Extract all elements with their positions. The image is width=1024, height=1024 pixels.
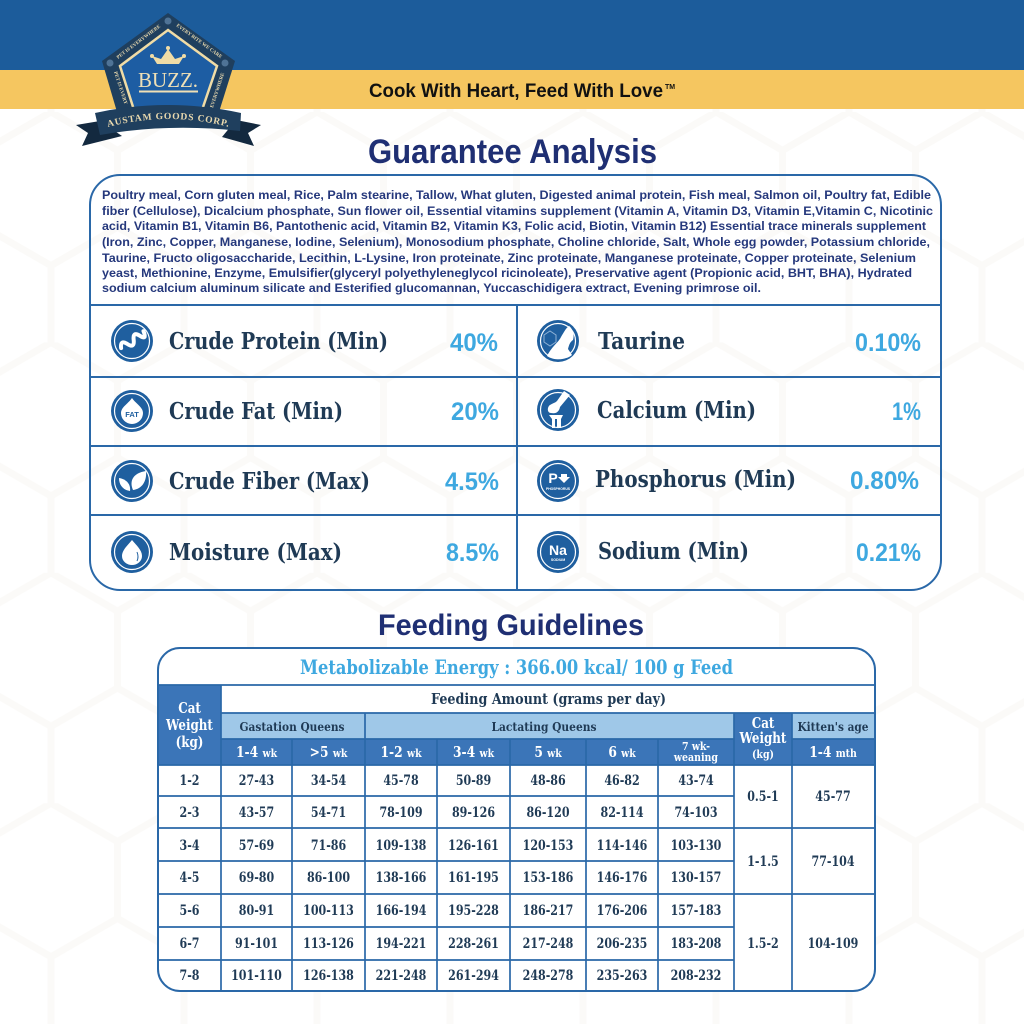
- cat weight header: Cat: [178, 701, 202, 717]
- icon: sodium: SODIUM: [551, 558, 565, 562]
- row 3-4: 57-69: [239, 837, 274, 853]
- value: crude fiber: 4.5%: [445, 468, 499, 496]
- row 1-2: 43-74: [678, 772, 714, 788]
- label: moisture: Moisture (Max): [169, 539, 342, 566]
- row 1-2: 50-89: [456, 772, 491, 788]
- ingredients text block: [102, 188, 933, 295]
- week sub-headers: weaning: [673, 751, 719, 764]
- row 7-8: 248-278: [523, 967, 573, 983]
- row 2-3: 78-109: [379, 804, 423, 820]
- icon: crude protein: [111, 320, 153, 362]
- value: sodium: 0.21%: [856, 539, 921, 567]
- icon: phosphorus: P: [548, 470, 558, 486]
- row 2-3: 82-114: [601, 804, 644, 820]
- row 7-8: 235-263: [597, 967, 647, 983]
- row 3-4: 126-161: [448, 837, 499, 853]
- icon: taurine: [537, 320, 579, 362]
- label: sodium: Sodium (Min): [598, 538, 749, 565]
- ingredients text block: yeast, Methionine, Enzyme, Emulsifier(glyceryl polyethyleneglycol ricinoleate), Preservative agent (Propionic acid, BHT, BHA), Hydrated: [102, 266, 912, 280]
- week sub-headers: [236, 740, 857, 764]
- header yellow band: [0, 70, 1024, 109]
- row 6-7: 6-7: [180, 935, 199, 951]
- lactating heading: Lactating Queens: [492, 719, 596, 734]
- title: Feeding Guidelines: Feeding Guidelines: [378, 609, 644, 642]
- tagline: TM: [665, 84, 675, 91]
- logo: Buzz badge: PET IS EVERYWHERE: [116, 24, 162, 61]
- icon: phosphorus: [537, 460, 579, 502]
- cat weight header: Weight: [165, 718, 214, 734]
- second cat weight header: Weight: [739, 731, 787, 747]
- row 4-5: [180, 869, 721, 885]
- value: taurine: 0.10%: [855, 329, 921, 357]
- logo: Buzz badge: AUSTAM GOODS CORP.: [108, 112, 228, 127]
- value: phosphorus: 0.80%: [850, 467, 919, 495]
- row 7-8: 126-138: [303, 967, 354, 983]
- row 6-7: 228-261: [448, 935, 499, 951]
- row 4-5: 69-80: [239, 869, 274, 885]
- row 2-3: 86-120: [526, 804, 570, 820]
- row 7-8: 221-248: [376, 967, 426, 983]
- row 4-5: 86-100: [307, 869, 350, 885]
- week sub-headers: 1-4 wk: [236, 744, 278, 761]
- row 6-7: 91-101: [235, 935, 278, 951]
- icon: sodium: [537, 531, 579, 573]
- icon: sodium: Na: [549, 542, 567, 558]
- row 6-7: 183-208: [671, 935, 721, 951]
- icon: moisture: [111, 531, 153, 573]
- week sub-headers: 3-4 wk: [453, 744, 495, 761]
- row 3-4: 114-146: [597, 837, 647, 853]
- row 6-7: [180, 935, 721, 951]
- row 6-7: 194-221: [376, 935, 426, 951]
- second cat weight header: (kg): [752, 748, 774, 761]
- value: moisture: 8.5%: [446, 539, 499, 567]
- row 1-2: 27-43: [239, 772, 274, 788]
- week sub-headers: 7 wk-: [682, 740, 710, 753]
- row 3-4: 103-130: [671, 837, 721, 853]
- kitten rows: 77-104: [812, 853, 855, 869]
- row 6-7: 113-126: [303, 935, 354, 951]
- tagline: Cook With Heart, Feed With Love: [369, 81, 663, 102]
- ingredients text block: Poultry meal, Corn gluten meal, Rice, Palm stearine, Tallow, What gluten, Digested animal protein, Fish meal, Salmon oil, Poultry fat, Edible: [102, 188, 931, 202]
- row 6-7: 217-248: [523, 935, 573, 951]
- week sub-headers: 1-2 wk: [381, 744, 422, 761]
- logo: Buzz badge: EVERYWHERE: [210, 72, 226, 109]
- logo: Buzz badge: PET IS EVERY: [112, 71, 128, 106]
- kitten rows: [747, 788, 858, 951]
- label: crude protein: Crude Protein (Min): [169, 328, 388, 355]
- value: crude protein: 40%: [450, 329, 498, 357]
- row 3-4: 3-4: [180, 837, 200, 853]
- row 5-6: 166-194: [376, 902, 427, 918]
- value: crude fat: 20%: [451, 398, 499, 426]
- feeding amount heading: Feeding Amount (grams per day): [431, 690, 666, 708]
- week sub-headers: 5 wk: [534, 744, 562, 761]
- week sub-headers: 6 wk: [608, 744, 636, 761]
- header blue band: [0, 0, 1024, 70]
- row 4-5: 4-5: [180, 869, 199, 885]
- row 5-6: 186-217: [523, 902, 573, 918]
- title: Guarantee Analysis: Guarantee Analysis: [368, 133, 657, 171]
- feeding table: [158, 648, 875, 991]
- row 5-6: 100-113: [303, 902, 354, 918]
- row 2-3: 2-3: [180, 804, 199, 820]
- row 7-8: 208-232: [671, 967, 721, 983]
- row 2-3: 43-57: [239, 804, 274, 820]
- label: phosphorus: Phosphorus (Min): [595, 466, 796, 493]
- ingredients text block: acid, Vitamin B1, Vitamin B6, Pantothenic acid, Vitamin B2, Vitamin K3, Folic acid, Biotin, Vitamin B12) Essential trace minerals supplement: [102, 219, 926, 233]
- icon: crude fat: FAT: [125, 410, 139, 419]
- row 3-4: [180, 837, 721, 853]
- week sub-headers: 1-4 mth: [809, 744, 857, 761]
- label: taurine: Taurine: [598, 328, 685, 355]
- row 4-5: 161-195: [448, 869, 499, 885]
- kitten rows: 104-109: [808, 935, 858, 951]
- kitten age heading: Kitten's age: [798, 719, 869, 734]
- ingredients text block: Taurine, Fructo oligosaccharide, Lecithin, L-Lysine, Iron proteinate, Zinc proteinate, Manganese proteinate, Copper proteinate, Selenium: [102, 251, 916, 265]
- row 3-4: 71-86: [311, 837, 346, 853]
- ingredients text block: (Iron, Zinc, Copper, Manganese, Iodine, Selenium), Monosodium phosphate, Choline chloride, Salt, Whole egg powder, Potassium chloride,: [102, 235, 930, 249]
- row 1-2: 46-82: [604, 772, 640, 788]
- row 7-8: 101-110: [231, 967, 282, 983]
- row 4-5: 130-157: [671, 869, 721, 885]
- value: calcium: 1%: [892, 398, 921, 426]
- row 5-6: 195-228: [448, 902, 499, 918]
- metabolizable energy heading: Metabolizable Energy : 366.00 kcal/ 100 g Feed: [300, 655, 733, 679]
- kitten rows: 45-77: [815, 788, 851, 804]
- label: crude fat: Crude Fat (Min): [169, 398, 343, 425]
- week sub-headers: >5 wk: [310, 744, 348, 761]
- ingredients text block: fiber (Cellulose), Dicalcium phosphate, Sun flower oil, Essential vitamins supplement (Vitamin A, Vitamin D3, Vitamin E,Vitamin C, Nicotinic: [102, 204, 933, 218]
- icon: phosphorus: PHOSPHORUS: [546, 487, 571, 491]
- kitten rows: 1.5-2: [747, 935, 779, 951]
- cat weight header: (kg): [176, 735, 203, 751]
- panel: guarantee analysis: [90, 175, 941, 590]
- logo: Buzz badge: [76, 13, 261, 146]
- icon: crude fiber: [111, 460, 153, 502]
- row 6-7: 206-235: [597, 935, 647, 951]
- logo: Buzz badge: BUZZ.: [138, 68, 198, 92]
- row 4-5: 146-176: [597, 869, 647, 885]
- row 5-6: 5-6: [180, 902, 199, 918]
- row 5-6: [180, 902, 721, 918]
- ingredients text block: sodium calcium aluminum silicate and Esterified glucomannan, Yuccaschidigera extract, Evening primrose oil.: [102, 281, 761, 295]
- row 7-8: [180, 967, 721, 983]
- row 1-2: [180, 772, 714, 788]
- cat weight header: [165, 701, 214, 751]
- row 5-6: 176-206: [597, 902, 647, 918]
- kitten rows: 0.5-1: [747, 788, 779, 804]
- row 1-2: 1-2: [180, 772, 199, 788]
- row 2-3: 74-103: [674, 804, 718, 820]
- row 1-2: 48-86: [530, 772, 566, 788]
- row 7-8: 261-294: [448, 967, 499, 983]
- row 2-3: 54-71: [311, 804, 346, 820]
- gestation heading: Gastation Queens: [240, 719, 344, 734]
- row 7-8: 7-8: [180, 967, 199, 983]
- row 4-5: 153-186: [523, 869, 573, 885]
- icon: crude fat: [111, 390, 153, 432]
- second cat weight header: [739, 716, 787, 761]
- row 4-5: 138-166: [376, 869, 426, 885]
- label: crude fiber: Crude Fiber (Max): [169, 468, 370, 495]
- row 3-4: 120-153: [523, 837, 573, 853]
- label: calcium: Calcium (Min): [597, 397, 756, 424]
- icon: calcium: [537, 389, 579, 431]
- kitten rows: 1-1.5: [747, 853, 779, 869]
- logo: Buzz badge: EVERY BITE WE CARE: [175, 24, 223, 60]
- second cat weight header: Cat: [752, 716, 775, 732]
- row 1-2: 45-78: [383, 772, 419, 788]
- row 5-6: 157-183: [671, 902, 721, 918]
- row 5-6: 80-91: [239, 902, 274, 918]
- row 2-3: [180, 804, 718, 820]
- row 2-3: 89-126: [452, 804, 495, 820]
- row 3-4: 109-138: [376, 837, 426, 853]
- row 1-2: 34-54: [311, 772, 347, 788]
